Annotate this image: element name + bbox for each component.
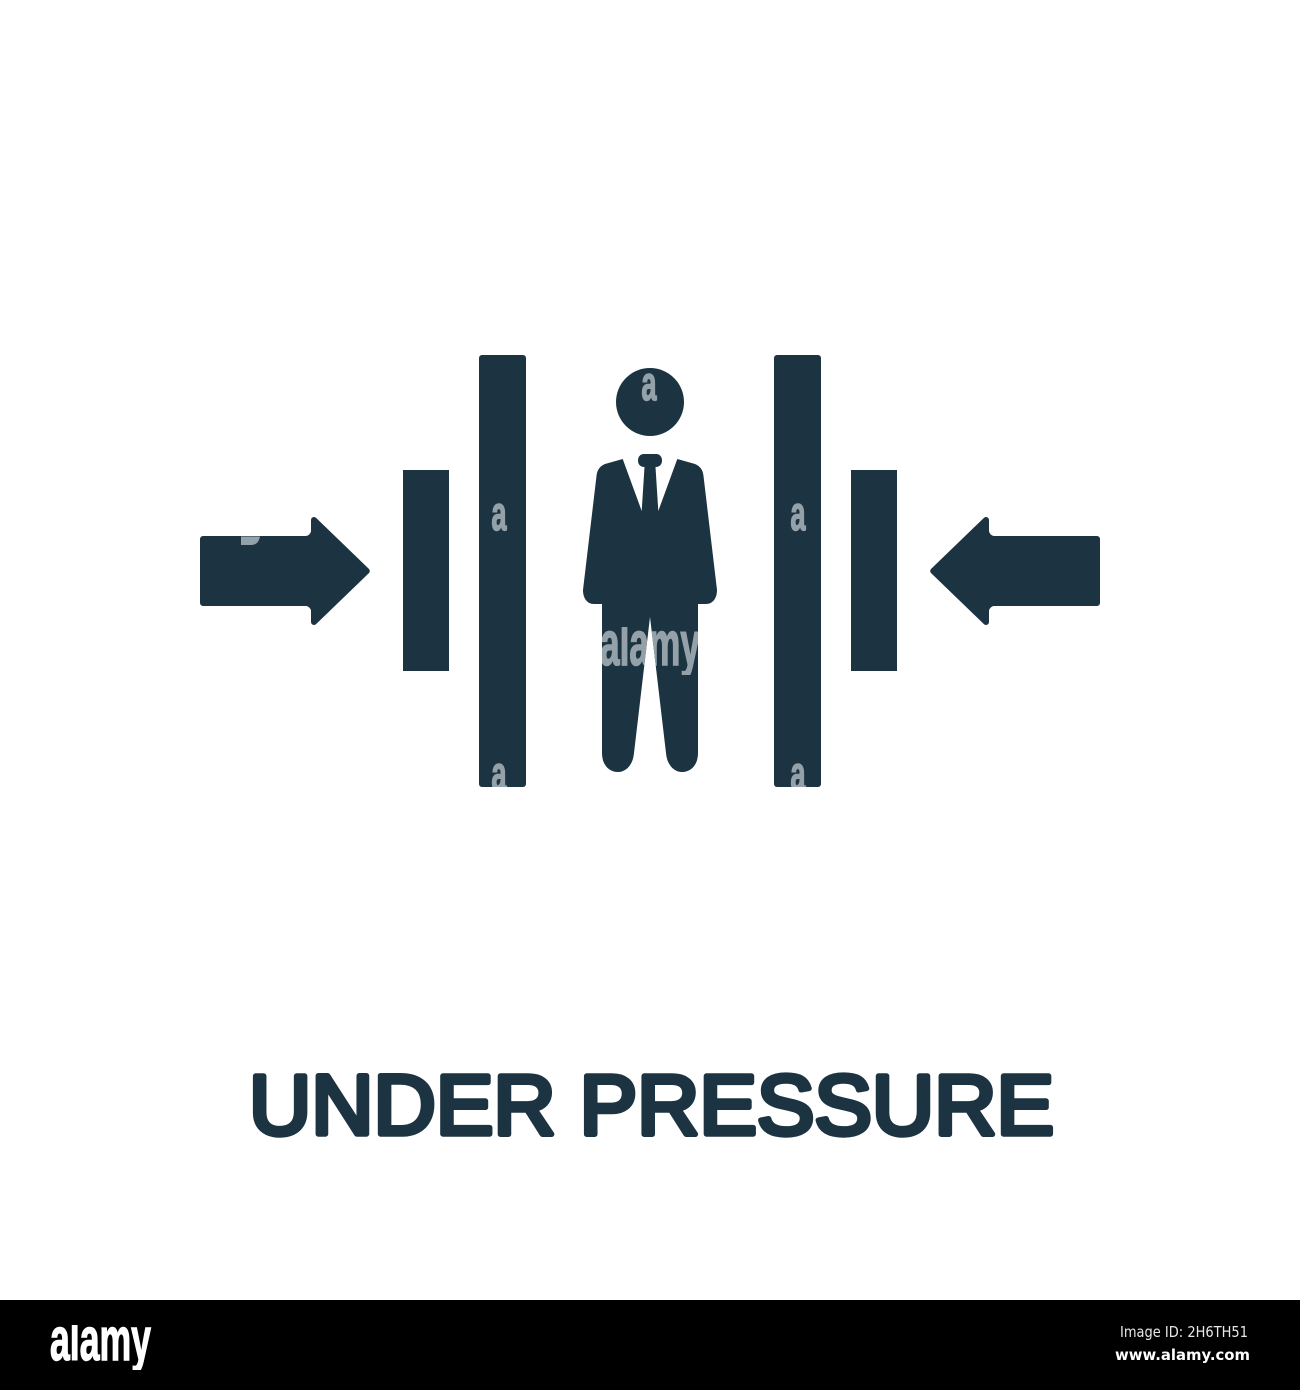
head	[616, 358, 684, 436]
image id: Image ID: 2H6TH51	[1120, 1323, 1248, 1341]
left outer short wall	[403, 470, 449, 671]
icon: under pressure pictogram	[203, 355, 1097, 801]
footer logo: alamy: alamy	[50, 1306, 151, 1373]
suit jacket and trousers: alamy	[600, 610, 700, 679]
left inner tall wall: a	[492, 488, 507, 541]
right outer short wall	[851, 470, 897, 671]
left inner tall wall	[479, 355, 526, 801]
suit jacket and trousers	[583, 459, 717, 772]
right inner tall wall: a	[790, 748, 806, 801]
icon: right arrow pointing left	[933, 520, 1097, 622]
footer bar	[0, 1300, 1300, 1390]
right inner tall wall: a	[790, 488, 806, 541]
title: UNDER PRESSURE: UNDER PRESSURE	[249, 1058, 1054, 1152]
website: www.alamy.com	[1115, 1346, 1250, 1364]
right inner tall wall	[774, 355, 821, 801]
left inner tall wall: a	[492, 748, 507, 801]
icon: left arrow pointing right	[203, 520, 367, 622]
head: a	[642, 358, 657, 411]
necktie	[638, 454, 662, 511]
infographic canvas	[0, 355, 1300, 1390]
icon: businessman in suit	[583, 358, 717, 772]
